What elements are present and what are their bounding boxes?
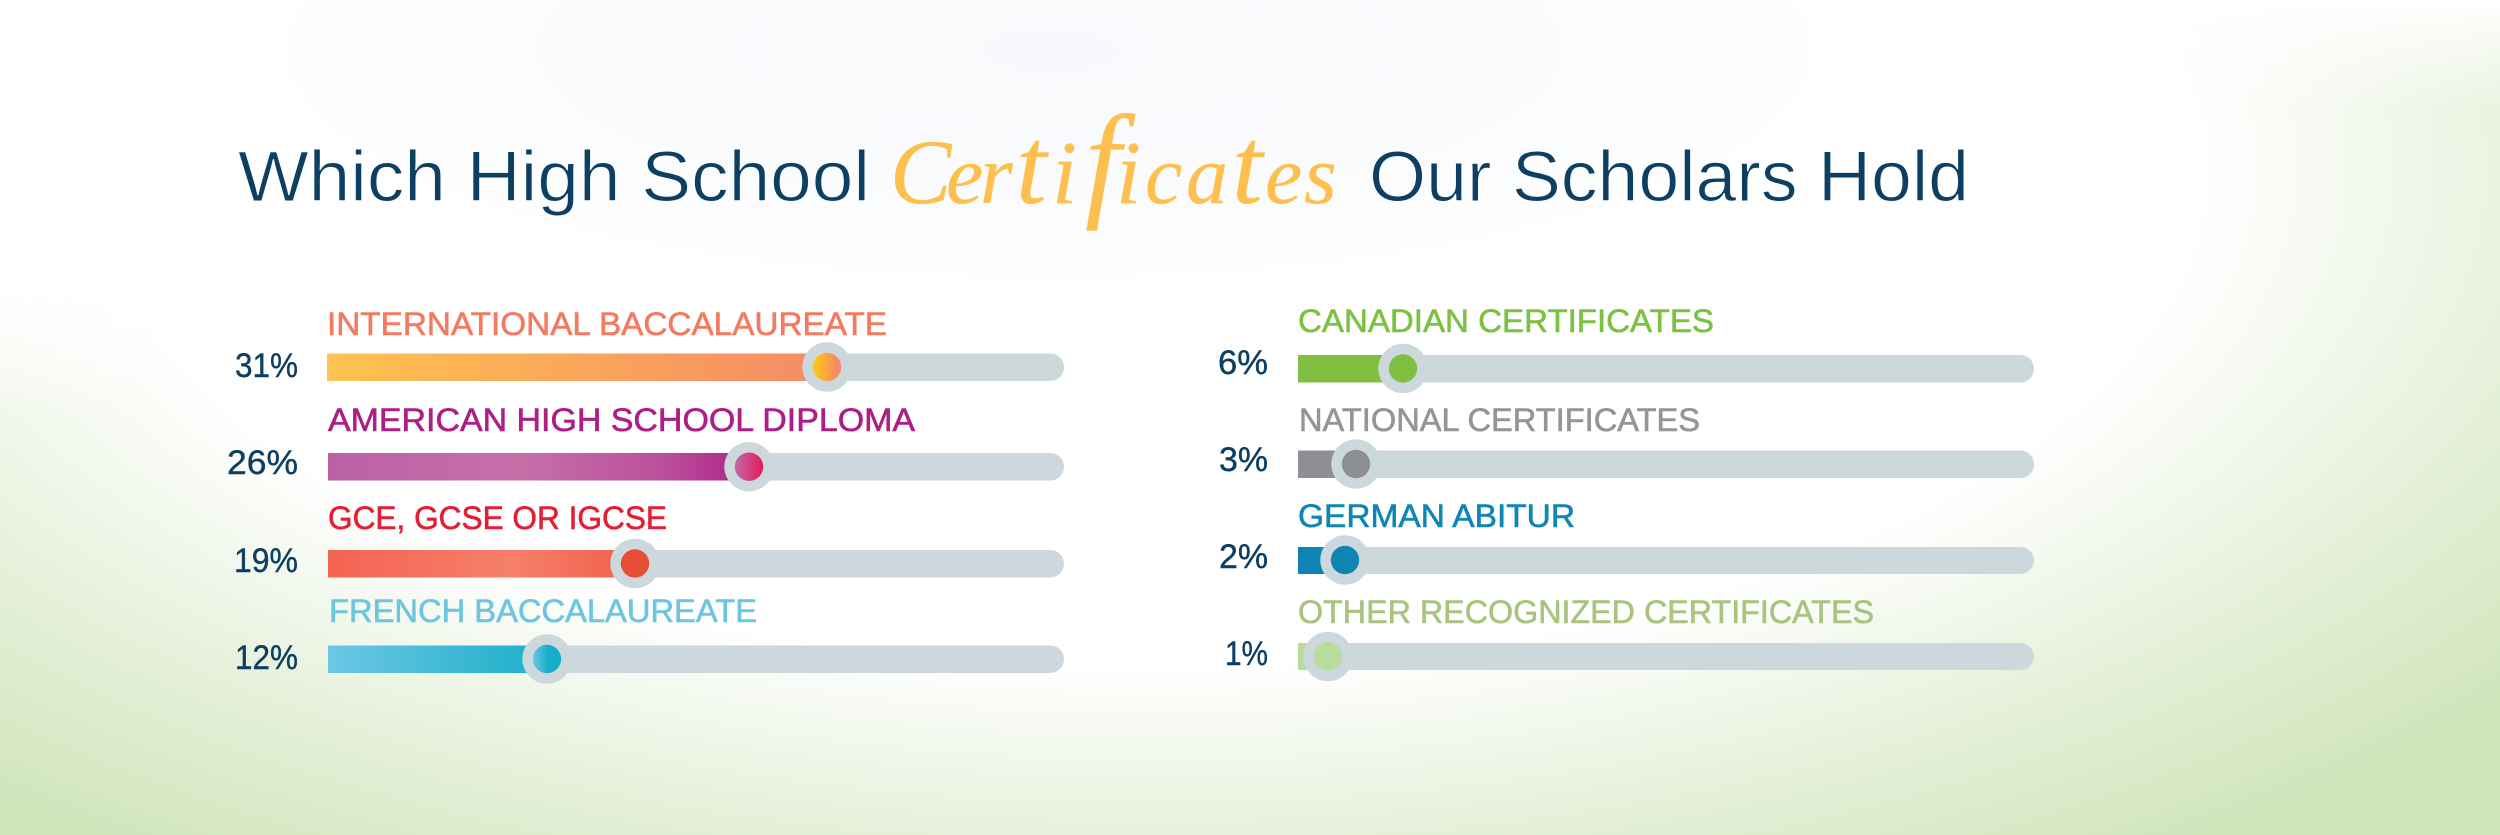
left column: certificates chart xyxy=(227,306,1064,684)
row: Canadian Certificates 6% xyxy=(1218,303,2034,393)
value: 19% xyxy=(234,542,298,580)
row: American High School Diploma 26% xyxy=(227,402,1064,491)
bar xyxy=(328,442,1064,491)
bar xyxy=(1298,439,2034,489)
title xyxy=(238,89,1969,231)
row: International Baccalaureate 31% xyxy=(235,306,1064,392)
bar xyxy=(327,342,1064,392)
bar xyxy=(1298,344,2034,393)
right column: certificates chart xyxy=(1218,303,2034,681)
title script word: Certificates: f xyxy=(1085,89,1136,231)
label: CANADIAN CERTIFICATES xyxy=(1298,303,1714,339)
bar xyxy=(328,539,1064,588)
row: French Baccalaureate 12% xyxy=(235,593,1064,684)
label: NATIONAL CERTIFICATES xyxy=(1299,402,1700,438)
title script word: Certificates: c xyxy=(1145,129,1182,222)
title script word: Certificates: r xyxy=(980,129,1013,222)
value: 6% xyxy=(1218,344,1268,382)
value: 1% xyxy=(1225,635,1268,673)
title script word: Certificates: e xyxy=(1265,129,1302,222)
title text: Which High School: Which High School xyxy=(238,138,870,217)
bar xyxy=(1298,535,2034,585)
label: OTHER RECOGNIZED CERTIFICATES xyxy=(1298,594,1874,630)
bar xyxy=(328,634,1064,684)
title script word: Certificates: s xyxy=(1304,129,1337,222)
value: 31% xyxy=(235,347,298,385)
title script word: Certificates: C xyxy=(890,121,953,223)
row: GCE, GCSE or IGCSE 19% xyxy=(234,500,1064,588)
label: GERMAN ABITUR xyxy=(1298,498,1575,534)
label: GCE, GCSE OR IGCSE xyxy=(328,500,667,536)
value: 26% xyxy=(227,444,298,482)
label: INTERNATIONAL BACCALAUREATE xyxy=(327,306,887,342)
value: 12% xyxy=(235,639,298,677)
value: 3% xyxy=(1219,441,1268,479)
row: National Certificates 3% xyxy=(1219,402,2034,489)
label: FRENCH BACCALAUREATE xyxy=(329,593,757,629)
title script word: Certificates: a xyxy=(1186,129,1228,222)
title script word: Certificates: e xyxy=(946,129,983,222)
value: 2% xyxy=(1219,538,1268,576)
title script word: Certificates: t xyxy=(1232,105,1265,227)
bar xyxy=(1298,632,2034,681)
row: Other Recognized Certificates 1% xyxy=(1225,594,2034,681)
row: German Abitur 2% xyxy=(1219,498,2034,585)
title script word: Certificates: i xyxy=(1116,124,1141,223)
title script word: Certificates: t xyxy=(1016,105,1049,227)
title text: Our Scholars Hold: Our Scholars Hold xyxy=(1369,138,1969,217)
label: AMERICAN HIGH SCHOOL DIPLOMA xyxy=(328,402,916,438)
title script word: Certificates: i xyxy=(1052,124,1077,223)
